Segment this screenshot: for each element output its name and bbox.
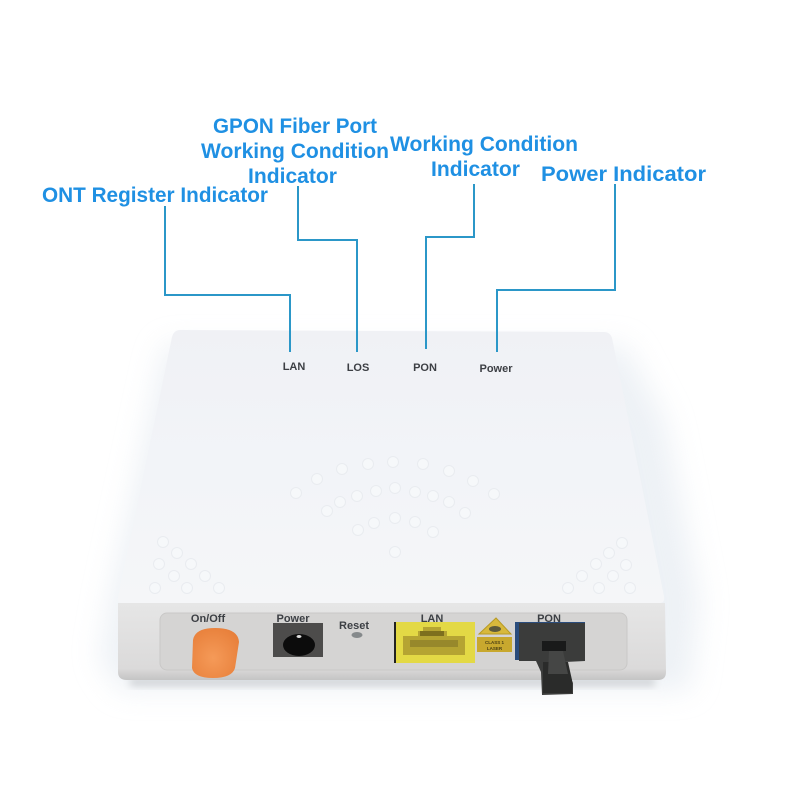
on/off switch	[191, 613, 239, 678]
callout: GPON fiber port: GPON Fiber Port	[213, 115, 377, 138]
power jack: Power	[276, 613, 310, 625]
embossed dots: right vent	[562, 538, 636, 594]
laser warning label	[477, 618, 512, 652]
embossed dots: centre logo	[290, 456, 500, 558]
reset hole: Reset	[339, 620, 369, 632]
callout: working condition	[390, 133, 578, 349]
PON fiber port	[515, 613, 585, 695]
front face	[118, 603, 666, 680]
embossed dots: left vent	[150, 536, 224, 594]
callout: GPON fiber port	[201, 115, 389, 352]
callout: working condition: Indicator	[431, 158, 520, 181]
top face	[118, 330, 664, 603]
router device	[118, 330, 666, 695]
laser warning label: LASER	[487, 646, 503, 651]
callout: ONT register: ONT Register Indicator	[42, 184, 268, 207]
reset hole	[339, 620, 369, 638]
contact shadow	[130, 678, 655, 686]
power jack	[273, 613, 323, 657]
device shadow	[100, 345, 700, 690]
laser warning label: CLASS 1	[485, 640, 504, 645]
callout: power indicator	[497, 163, 706, 352]
leader line to LOS	[298, 186, 357, 352]
port recess	[160, 613, 627, 670]
callout: ONT register	[42, 184, 290, 352]
LAN port	[394, 613, 475, 663]
printed LED labels: Power	[479, 363, 513, 375]
callout: power indicator: Power Indicator	[541, 163, 706, 186]
PON fiber port: PON	[537, 613, 561, 625]
callout: GPON fiber port: Indicator	[248, 165, 337, 188]
printed LED labels	[283, 361, 513, 375]
printed LED labels: LOS	[347, 362, 369, 374]
callout: working condition: Working Condition	[390, 133, 578, 156]
printed LED labels: PON	[413, 362, 437, 374]
LAN port: LAN	[421, 613, 443, 625]
leader line to LAN	[165, 206, 290, 352]
leader line to PON	[426, 184, 474, 349]
printed LED labels: LAN	[283, 361, 305, 373]
on/off switch: On/Off	[191, 613, 225, 625]
callout: GPON fiber port: Working Condition	[201, 140, 389, 163]
leader line to Power	[497, 184, 615, 352]
